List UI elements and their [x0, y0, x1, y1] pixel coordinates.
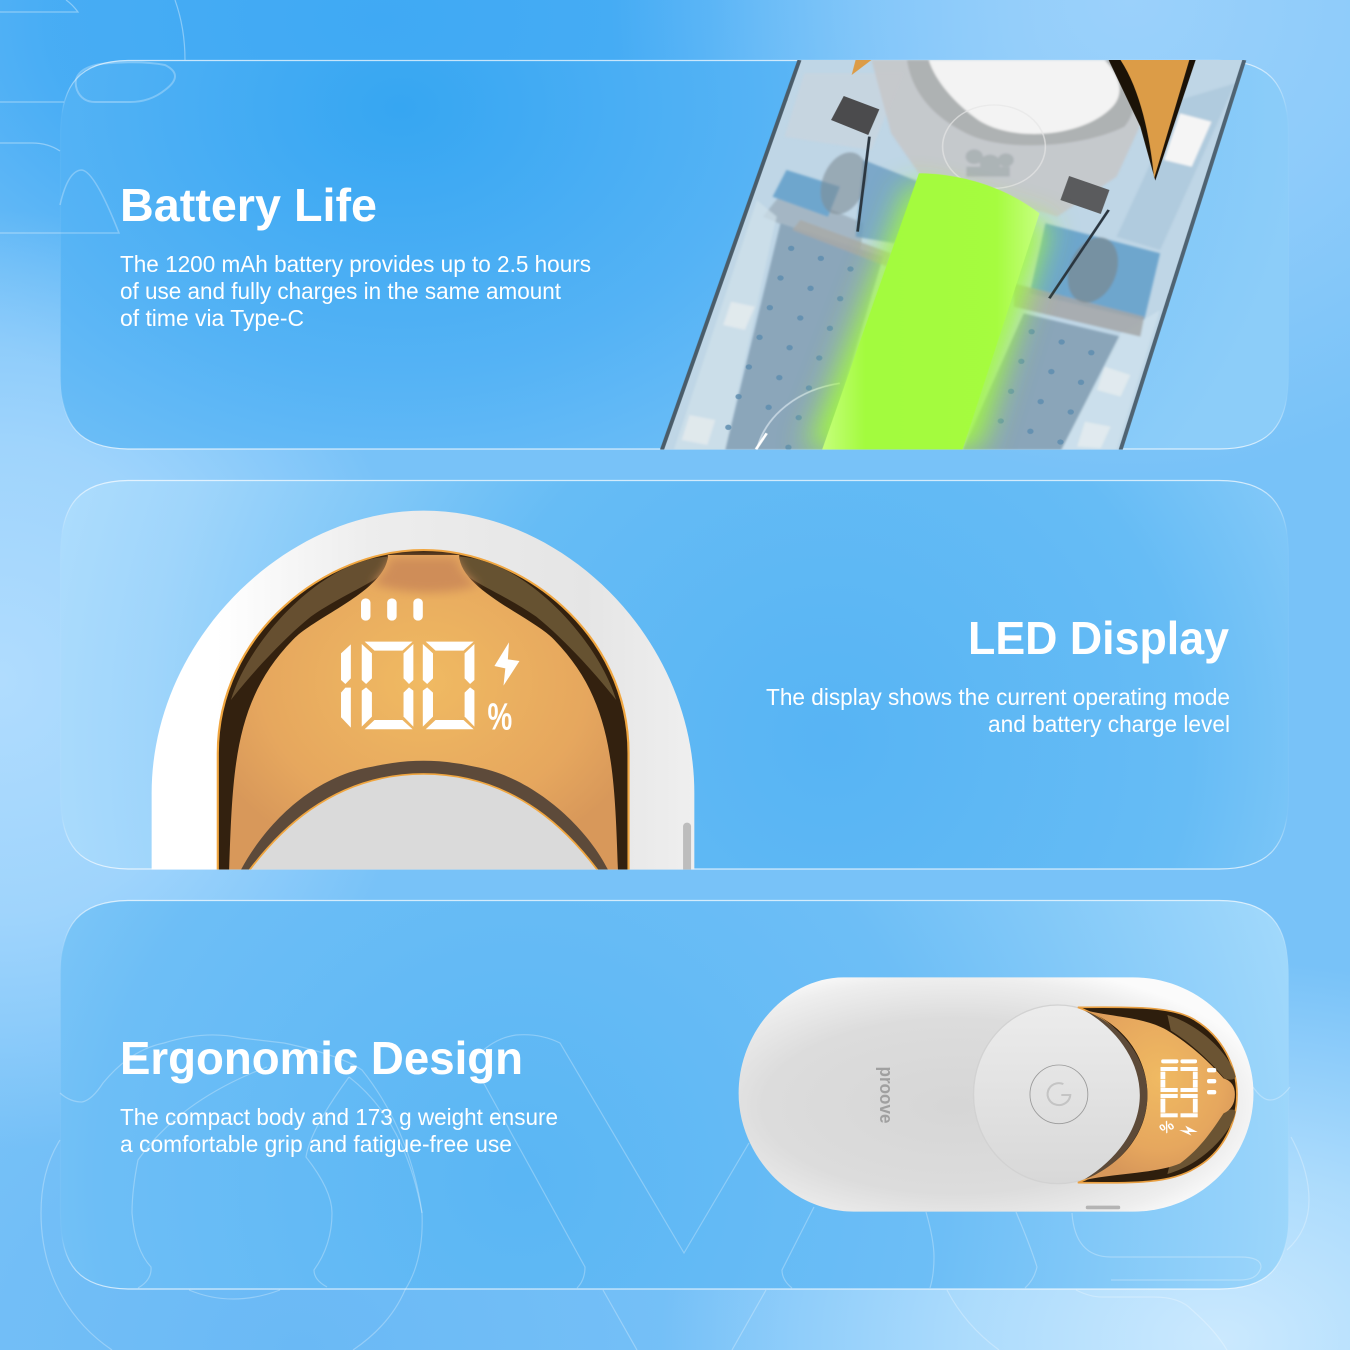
orange display — [229, 555, 618, 872]
percent sign: % — [488, 696, 512, 738]
battery glow — [808, 183, 1047, 450]
battery cell — [822, 173, 1039, 450]
chart marks: battery dots — [725, 246, 1094, 450]
product: transparent device with glowing battery — [661, 60, 1245, 450]
text: battery description: The 1200 mAh battery provides up to 2.5 hours — [120, 251, 591, 277]
product: device front with 100% display — [152, 511, 694, 873]
brand name: proove — [876, 1066, 896, 1124]
display segments: 100 — [341, 642, 474, 729]
icon: orange display wedge — [1109, 60, 1196, 181]
panel: ergonomic design background — [60, 900, 1288, 1289]
panel: battery life background — [60, 60, 1288, 449]
text: ergonomic description: The compact body and 173 g weight ensure — [120, 1104, 558, 1130]
charging port — [1086, 1206, 1120, 1209]
side button — [683, 823, 691, 873]
display segments — [1160, 1059, 1198, 1117]
orange display — [1085, 1010, 1235, 1180]
heading: Ergonomic Design: Ergonomic Design — [120, 1032, 523, 1084]
icon: power button — [1030, 1065, 1088, 1124]
dark display recess — [1078, 1007, 1237, 1183]
percent sign: % — [1157, 1118, 1177, 1138]
background outline lettering, top left — [0, 0, 185, 233]
white device body — [739, 977, 1253, 1212]
battery level bars — [361, 598, 423, 621]
text: ergonomic description: a comfortable grip and fatigue-free use — [120, 1131, 512, 1157]
text: ergonomic description — [120, 1104, 558, 1157]
text: battery description — [120, 251, 591, 331]
dark display recess — [218, 550, 629, 872]
panel: LED display background — [60, 480, 1288, 869]
inner crescent shadow — [1085, 1011, 1147, 1179]
text: display description: and battery charge level — [988, 711, 1230, 737]
text: battery description: of use and fully charges in the same amount — [120, 278, 561, 304]
text: display description — [766, 684, 1230, 737]
heading: LED Display: LED Display — [968, 612, 1229, 664]
lower dark crescent — [240, 761, 609, 872]
heading: Battery Life: Battery Life — [120, 179, 377, 231]
round control disc — [973, 1005, 1142, 1184]
text: battery description: of time via Type-C — [120, 305, 304, 331]
round control disc — [248, 774, 599, 872]
icon: lightning bolt — [1179, 1126, 1198, 1136]
battery level bars — [1207, 1068, 1216, 1094]
product: device top view — [739, 977, 1253, 1212]
icon: lightning bolt — [494, 642, 519, 686]
white device body — [152, 511, 694, 872]
text: display description: The display shows the current operating mode — [766, 684, 1230, 710]
